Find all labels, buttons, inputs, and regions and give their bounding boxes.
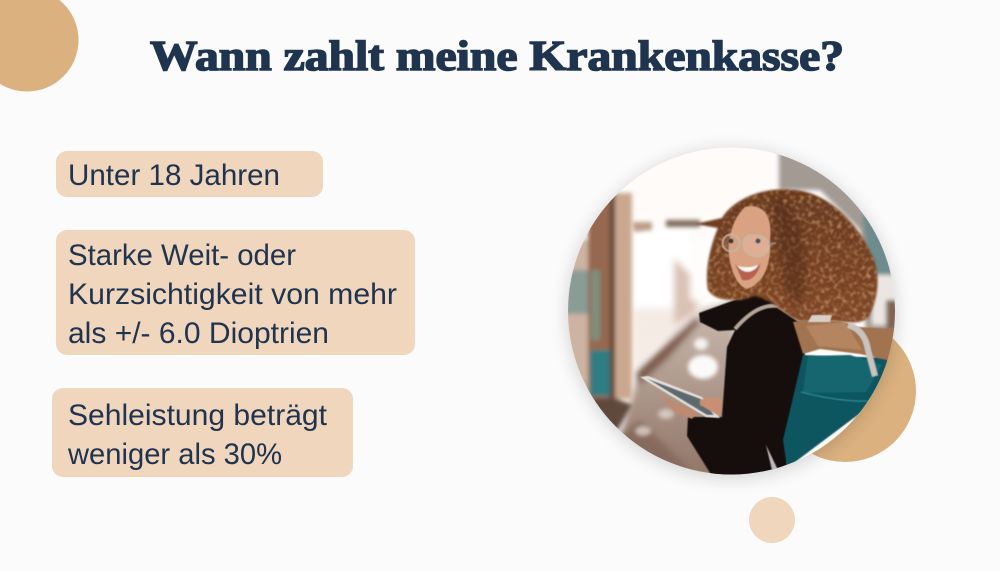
photo: woman with tablet and backpack bbox=[560, 140, 905, 485]
decorative circle: top left bbox=[0, 0, 78, 92]
panel: strong refractive error: Starke Weit- oder bbox=[68, 239, 296, 272]
panel: under 18: Unter 18 Jahren bbox=[68, 159, 280, 192]
tablet and hands bbox=[640, 376, 722, 419]
panel: vision below 30 percent: weniger als 30% bbox=[67, 438, 282, 471]
title: Wann zahlt meine Krankenkasse? bbox=[150, 34, 844, 80]
photo background: right building bbox=[779, 145, 900, 335]
panel: strong refractive error bbox=[56, 230, 415, 355]
panel: vision below 30 percent: Sehleistung beträgt bbox=[68, 399, 328, 432]
panel: strong refractive error: als +/- 6.0 Dioptrien bbox=[68, 317, 329, 350]
backpack bbox=[783, 315, 895, 468]
black coat bbox=[687, 286, 805, 476]
panel: strong refractive error: Kurzsichtigkeit von mehr bbox=[68, 278, 397, 311]
photo background: left pillars bbox=[560, 192, 632, 440]
photo background: platform and train bbox=[618, 260, 735, 474]
hair bbox=[695, 189, 878, 323]
decorative circle: small bottom bbox=[749, 497, 795, 543]
panel: under 18 bbox=[56, 151, 323, 197]
panel: vision below 30 percent bbox=[52, 388, 353, 477]
face bbox=[722, 206, 776, 289]
decorative circle: behind photo bbox=[774, 320, 916, 462]
